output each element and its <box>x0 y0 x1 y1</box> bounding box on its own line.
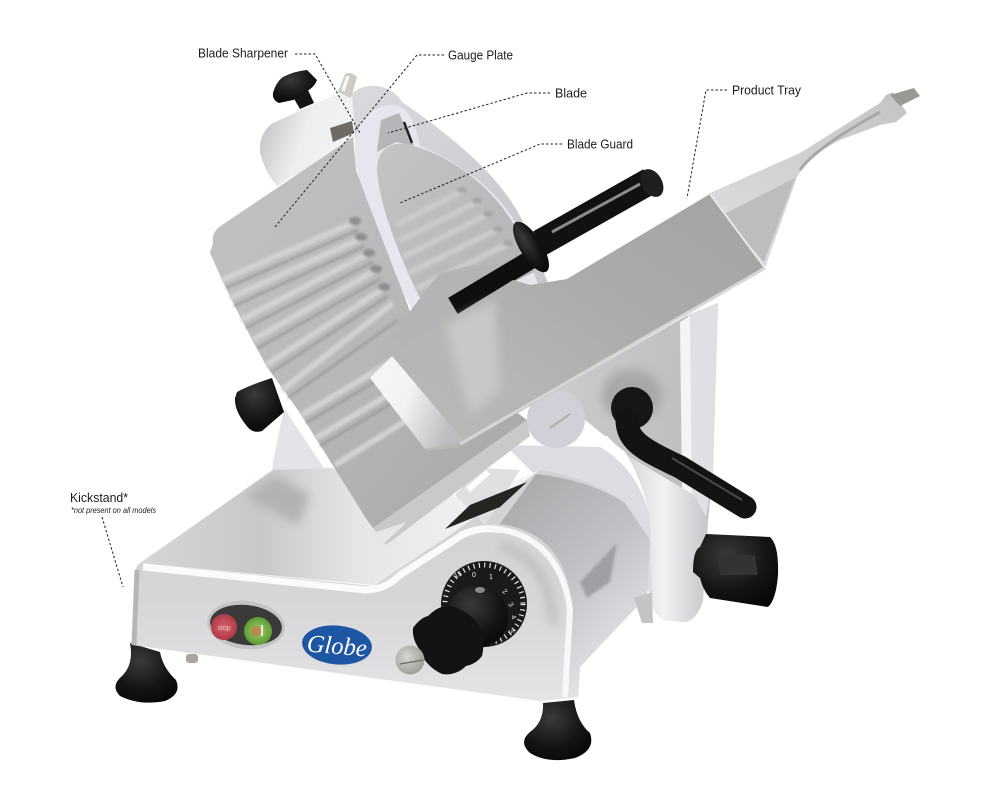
pusher <box>392 262 520 360</box>
thickness dial: 15 <box>453 571 463 580</box>
lever <box>611 387 745 507</box>
sharpener pin <box>338 73 357 98</box>
sharpener knob <box>273 70 317 109</box>
central stalk <box>272 408 345 500</box>
Globe logo: Globe <box>306 630 368 663</box>
thickness dial: 4 <box>509 614 517 620</box>
left foot <box>115 643 178 703</box>
thickness dial: 2 <box>501 588 508 596</box>
thickness dial <box>441 561 527 648</box>
product tray arm <box>708 88 920 268</box>
carriage shaft <box>445 468 527 529</box>
lower lavender plane <box>505 445 652 595</box>
gauge plate <box>210 137 530 547</box>
label: Kickstand: Kickstand* <box>70 491 128 505</box>
thickness dial: 3 <box>506 602 514 608</box>
stop start switch: stop <box>217 625 231 632</box>
label: Gauge Plate <box>275 48 513 227</box>
label: Product Tray <box>687 84 802 198</box>
label: Kickstand: *not present on all models <box>71 506 156 515</box>
label: Blade: Blade <box>555 86 587 100</box>
adjustment screw <box>396 646 424 674</box>
blade <box>352 86 555 350</box>
base top surface <box>140 468 540 585</box>
label: Kickstand <box>70 491 156 587</box>
base front <box>132 470 650 701</box>
label: Blade Sharpener: Blade Sharpener <box>198 46 288 60</box>
label: Gauge Plate: Gauge Plate <box>448 48 513 62</box>
slicer handle <box>453 165 668 306</box>
blade guard <box>355 105 540 325</box>
left locking knob <box>235 378 284 432</box>
thickness dial: 1 <box>489 574 493 581</box>
thickness knob <box>413 606 483 674</box>
thickness dial: 5 <box>507 630 514 634</box>
stop start switch <box>205 597 287 653</box>
label: Blade <box>388 86 587 133</box>
thickness dial: 0 <box>472 572 476 579</box>
product tray <box>370 194 765 451</box>
right foot <box>524 700 591 760</box>
label: Blade Sharpener <box>198 46 360 133</box>
label: Blade Guard <box>400 138 633 203</box>
sharpener housing <box>260 92 372 186</box>
label: Blade Guard: Blade Guard <box>567 138 633 152</box>
rear column <box>530 303 718 622</box>
carriage bracket <box>634 592 653 623</box>
right adjustment knob <box>693 534 778 607</box>
pivot disc <box>527 390 585 448</box>
small rear foot <box>186 654 198 663</box>
Globe logo <box>297 620 377 670</box>
label: Product Tray: Product Tray <box>732 84 802 98</box>
